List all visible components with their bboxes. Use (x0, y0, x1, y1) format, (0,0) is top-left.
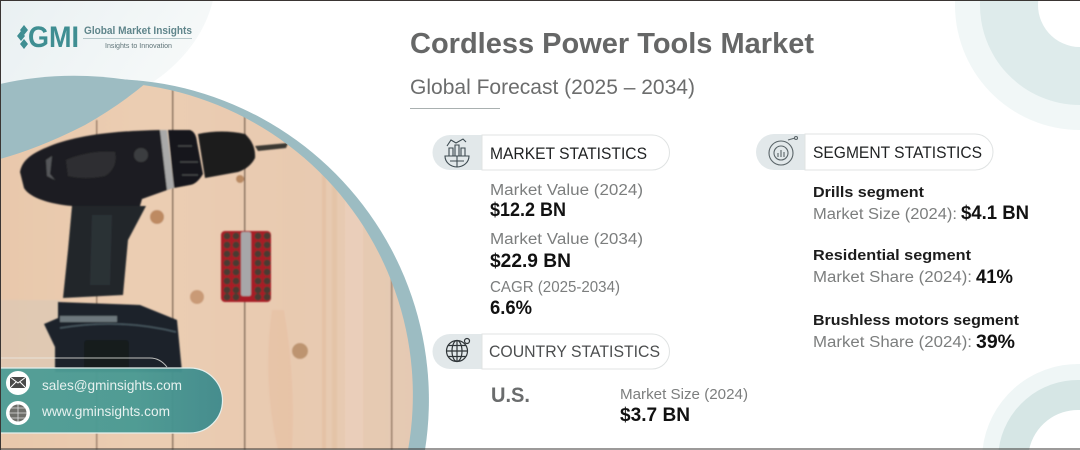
panel: blue-grey blob behind logo (0, 76, 146, 159)
U.S. market size: Market Size (2024) (620, 387, 748, 403)
decorative ring: top right (955, 0, 1080, 130)
icon: screwdriver bit set (221, 231, 271, 302)
U.S. market size (620, 387, 748, 426)
icon: segment donut chart (769, 136, 798, 165)
residential segment: Market Share (2024): (813, 269, 972, 286)
photo: wooden planks with drill (0, 70, 420, 450)
icon: logo diamonds (17, 25, 28, 49)
drills segment: $4.1 BN (961, 203, 1029, 224)
title: Cordless Power Tools Market (410, 28, 814, 60)
logo: Global Market Insights: GMI (28, 21, 79, 54)
icon: market globe chart (445, 139, 469, 167)
icon: web globe (6, 401, 30, 425)
section header: segment statistics: SEGMENT STATISTICS (813, 143, 982, 162)
icon: globe with pin (446, 338, 470, 362)
logo: Global Market Insights (17, 21, 192, 54)
wood background (0, 70, 420, 450)
section header: market statistics: MARKET STATISTICS (490, 144, 647, 163)
panel: pale logo background (0, 0, 213, 90)
CAGR (490, 279, 620, 319)
website address: www.gminsights.com (41, 403, 170, 419)
section header: country statistics (433, 334, 670, 369)
market value 2024: Market Value (2024) (490, 182, 643, 199)
brushless motors segment: 39% (976, 332, 1015, 353)
residential segment (813, 247, 1013, 288)
market value 2034: $22.9 BN (490, 251, 571, 272)
section header: country statistics: COUNTRY STATISTICS (489, 342, 660, 361)
brushless motors segment: Brushless motors segment (813, 312, 1019, 329)
market value 2024 (490, 182, 643, 221)
brushless motors segment (813, 312, 1019, 353)
country label: U.S.: U.S. (491, 384, 530, 407)
logo: Global Market Insights: Global Market Insights (84, 25, 192, 37)
drills segment (813, 184, 1029, 224)
email address: sales@gminsights.com (42, 377, 182, 393)
drills segment: Market Size (2024): (813, 206, 957, 223)
contact pill (0, 358, 222, 433)
brushless motors segment: Market Share (2024): (813, 334, 972, 351)
residential segment: 41% (976, 267, 1013, 288)
icon: cordless drill (20, 130, 288, 372)
section header: segment statistics (756, 134, 993, 170)
residential segment: Residential segment (813, 247, 971, 264)
U.S. market size: $3.7 BN (620, 405, 690, 426)
decorative ring: bottom right (982, 364, 1080, 450)
CAGR: CAGR (2025-2034) (490, 279, 620, 296)
panel: teal circle band (0, 79, 429, 450)
market value 2034: Market Value (2034) (490, 231, 643, 248)
divider under subtitle (410, 108, 500, 109)
drills segment: Drills segment (813, 184, 924, 201)
icon: email (6, 371, 30, 395)
subtitle: Global Forecast (2025 – 2034) (410, 76, 695, 99)
section header: market statistics (433, 135, 670, 170)
logo: Global Market Insights: Insights to Innovation (105, 41, 172, 50)
market value 2024: $12.2 BN (490, 200, 566, 221)
CAGR: 6.6% (490, 298, 532, 319)
market value 2034 (490, 231, 643, 272)
